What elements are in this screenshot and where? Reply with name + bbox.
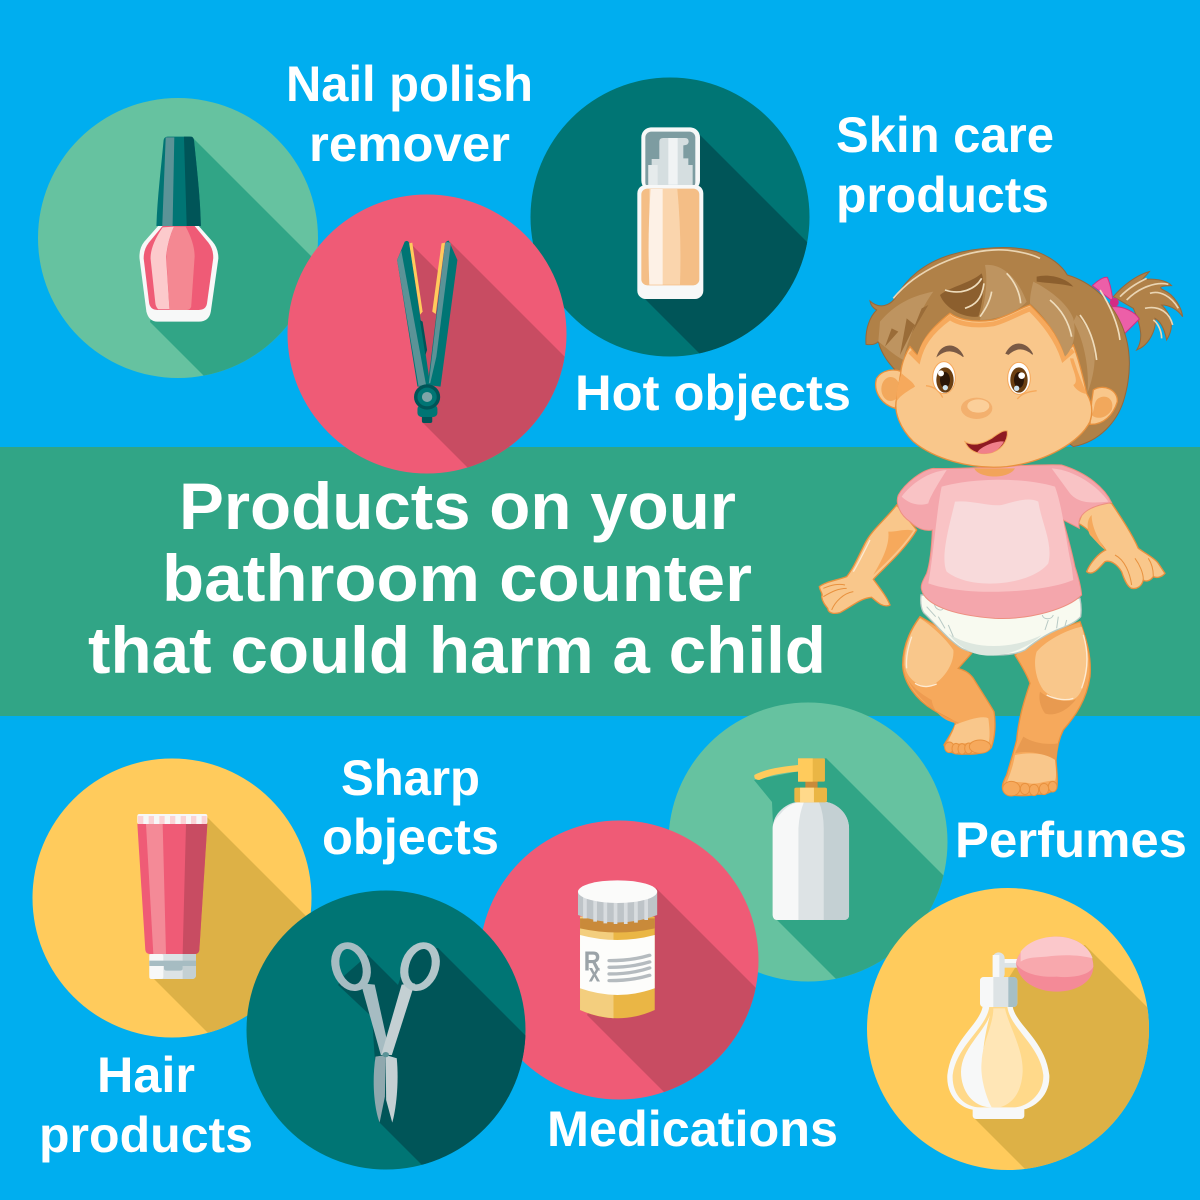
heading: main title: bathroom counter	[162, 541, 752, 615]
cheek shades	[897, 358, 1087, 402]
toddler body	[819, 465, 1165, 656]
toddler head	[866, 248, 1183, 467]
panel: perfumes circle	[867, 888, 1149, 1170]
label: hair products: Hair	[97, 1047, 195, 1103]
icon: prescription bottle	[578, 880, 657, 1018]
heading: main title	[88, 469, 826, 687]
ear right	[1090, 387, 1117, 424]
panel: pump soap circle	[669, 702, 948, 982]
bow	[1092, 277, 1139, 335]
label: sharp objects	[322, 750, 499, 865]
panel: nail polish remover circle	[38, 98, 318, 378]
icon: pump soap bottle	[754, 758, 849, 920]
right arm	[1078, 503, 1165, 589]
right eye	[1008, 362, 1037, 399]
title band	[0, 447, 1200, 716]
face	[896, 305, 1092, 467]
icon: foundation bottle	[637, 127, 703, 299]
label: hair products: products	[39, 1107, 253, 1163]
panel: medications circle	[482, 820, 758, 1100]
label: sharp objects: objects	[322, 809, 499, 865]
toddler legs	[903, 617, 1090, 796]
shirt	[897, 465, 1112, 618]
panel: skin care products circle	[530, 78, 810, 356]
illustration: toddler	[819, 248, 1183, 796]
heading: main title: Products on your	[179, 469, 736, 543]
icon: cream tube	[137, 814, 207, 979]
label: skin care products: products	[836, 167, 1049, 223]
label: nail polish remover	[286, 56, 533, 172]
ponytail	[1113, 272, 1183, 350]
hairline shade	[910, 309, 1073, 360]
label: hot objects: Hot objects	[575, 365, 851, 421]
label: medications: Medications	[547, 1101, 838, 1157]
icon: hair straightener	[397, 241, 457, 423]
label: hair products	[39, 1047, 253, 1163]
label: perfumes: Perfumes	[955, 812, 1187, 868]
left arm	[819, 505, 917, 613]
panel: hot objects circle	[288, 194, 566, 474]
icon: scissors	[331, 943, 440, 1123]
label: nail polish remover: remover	[309, 116, 510, 172]
ear left	[876, 370, 902, 408]
mouth	[965, 431, 1007, 454]
label: skin care products	[836, 107, 1054, 223]
Rx symbol: x	[589, 958, 600, 987]
icon: nail polish bottle	[139, 137, 218, 322]
label: sharp objects: Sharp	[341, 750, 480, 806]
heading: main title: that could harm a child	[88, 613, 826, 687]
diaper	[921, 595, 1081, 656]
label: skin care products: Skin care	[836, 107, 1054, 163]
label: nail polish remover: Nail polish	[286, 56, 533, 112]
panel: hair products circle	[32, 758, 312, 1038]
Rx symbol: R	[584, 947, 601, 977]
eyebrows	[937, 344, 1033, 357]
panel: sharp objects circle	[246, 890, 526, 1170]
icon: perfume atomizer	[947, 937, 1093, 1119]
left eye	[926, 362, 955, 398]
hair base	[866, 248, 1129, 447]
nose	[961, 398, 992, 419]
hair locks	[878, 250, 1120, 393]
